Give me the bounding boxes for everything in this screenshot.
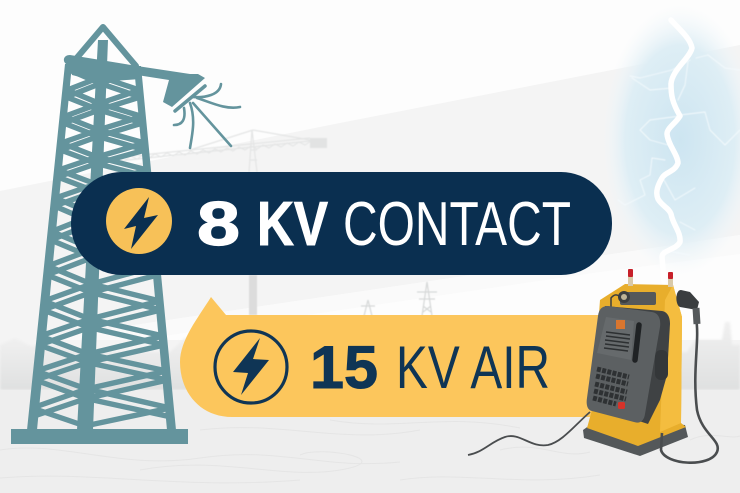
background: lightning glow xyxy=(602,5,740,275)
label: contact: CONTACT xyxy=(343,190,571,259)
display and speaker xyxy=(597,317,634,360)
lightning main stroke xyxy=(657,20,692,282)
yellow speech shape xyxy=(180,297,600,417)
indicator lamps xyxy=(628,269,673,287)
badge: 8 KV contact xyxy=(71,172,612,275)
lightning bolt xyxy=(618,20,740,282)
badge: 15 KV air xyxy=(180,297,600,417)
tower legs and mast xyxy=(27,40,176,430)
tower apex xyxy=(75,27,136,66)
right connector xyxy=(676,290,699,310)
tester device xyxy=(468,269,718,463)
background: crane xyxy=(118,130,327,315)
discharge bar xyxy=(175,86,205,111)
crossarm xyxy=(64,55,205,107)
background: hazy skyline xyxy=(0,322,740,390)
device base xyxy=(583,418,688,456)
tower base xyxy=(11,429,188,444)
device side shell xyxy=(605,306,670,424)
icon: outlined bolt xyxy=(215,331,287,403)
yellow column xyxy=(587,284,686,446)
icon: yellow circle bolt xyxy=(106,188,172,254)
control strip xyxy=(611,291,656,310)
cable grommet xyxy=(696,308,697,324)
device front panel xyxy=(587,306,660,423)
background: ground xyxy=(0,390,740,493)
transmission tower xyxy=(11,27,240,444)
label: 15: 15 xyxy=(310,334,378,401)
discharge wires xyxy=(174,84,240,148)
red button xyxy=(618,402,625,409)
label: KV: KV xyxy=(257,190,328,259)
label: KV air: KV AIR xyxy=(396,334,550,401)
dark pill xyxy=(71,172,612,275)
background: distant pylons xyxy=(361,282,437,316)
keypad xyxy=(593,369,629,404)
tower lattice xyxy=(31,70,171,426)
lightning branches xyxy=(618,55,740,255)
side handle slot xyxy=(635,325,639,360)
label: 8: 8 xyxy=(197,190,240,259)
left cable xyxy=(468,412,590,455)
right cable xyxy=(661,318,718,463)
